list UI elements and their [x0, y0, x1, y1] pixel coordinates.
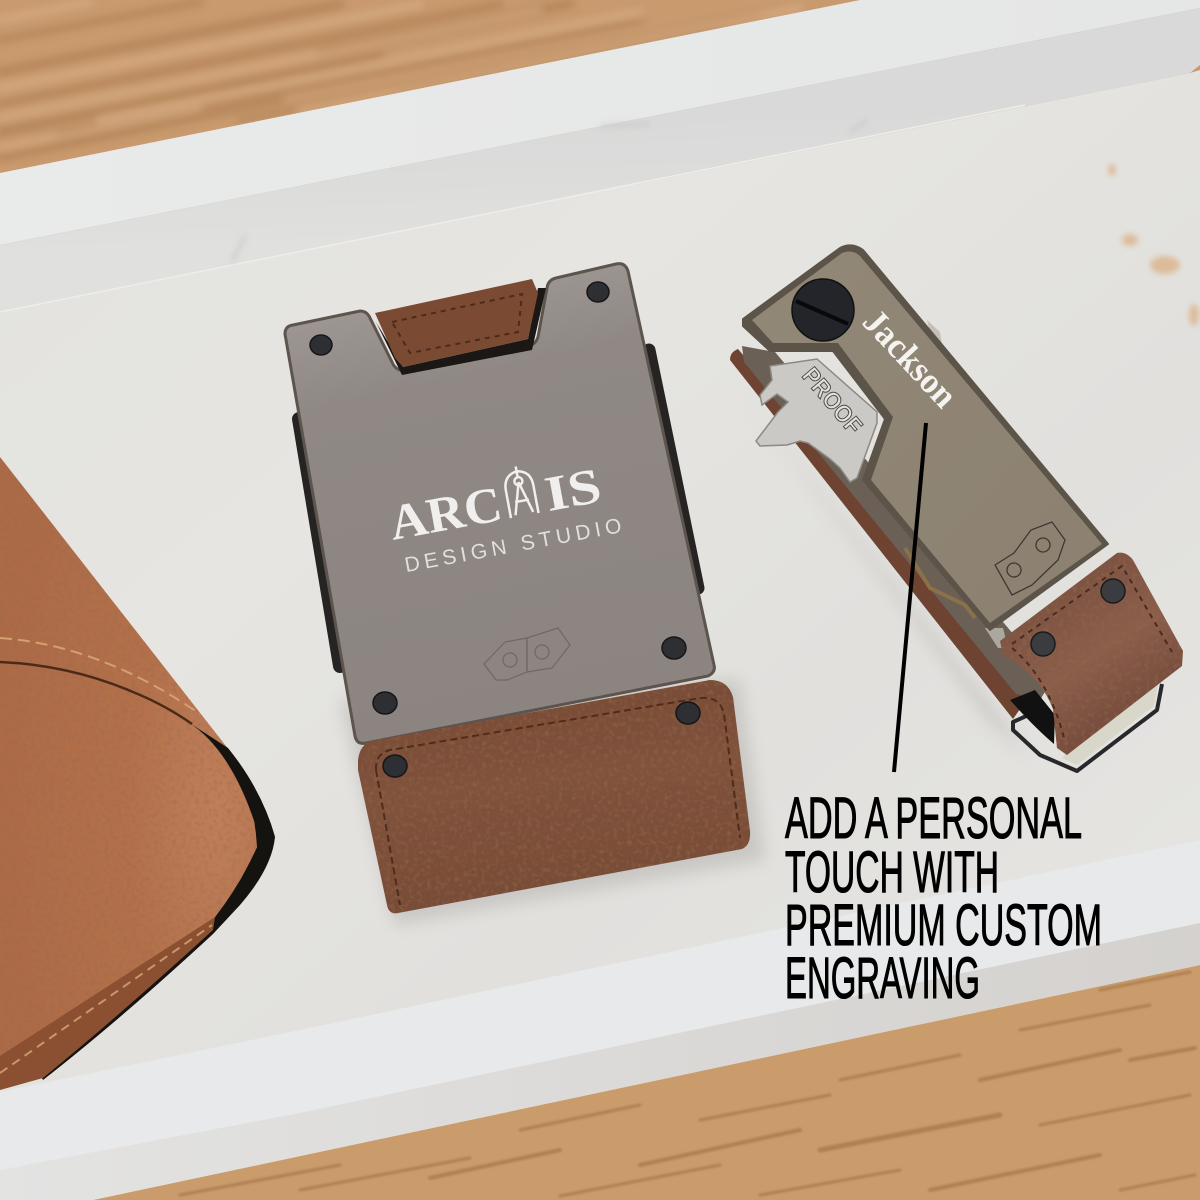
plate screws [310, 282, 686, 714]
marble veins [232, 120, 868, 262]
pouch lower stitches [0, 925, 212, 1073]
rear leather strip [730, 349, 1030, 719]
strap stitching [1012, 566, 1172, 742]
engraved logo: ARCAIS Design Studio: IS [540, 457, 605, 522]
pouch black edge [40, 745, 275, 1080]
folded key detail [905, 548, 975, 618]
pouch flap stitches [0, 638, 200, 714]
tray top rim upper band [0, 0, 1200, 245]
pouch lower band [0, 917, 215, 1090]
tray bottom rim lower band [0, 923, 1200, 1200]
callout text: ENGRAVING [785, 946, 980, 1011]
leather tab [375, 279, 538, 367]
engraved logo: ARCAIS Design Studio: ARC [385, 475, 506, 551]
side stud [927, 320, 943, 350]
engraved hex maker mark [484, 628, 570, 680]
background: wood table [0, 0, 1200, 260]
notch shadow [376, 288, 546, 375]
titanium body [743, 245, 1108, 630]
organizer shadow [740, 390, 1030, 760]
pivot screw [792, 279, 854, 341]
PROOF multitool [756, 359, 877, 482]
metal plate [285, 264, 714, 743]
key organizer with engraved name [730, 245, 1183, 771]
pouch black wedge at tip [188, 722, 275, 837]
wallet with engraving [285, 264, 765, 925]
engraved logo: ARCAIS Design Studio [384, 449, 623, 578]
elastic band left [299, 419, 340, 666]
elastic band right [649, 350, 698, 588]
callout text: TOUCH WITH [785, 840, 999, 905]
engraved logo: ARCAIS Design Studio: DESIGN STUDIO [403, 514, 623, 577]
wallet shadow [340, 680, 765, 925]
engraved hex mark [995, 522, 1065, 595]
PROOF multitool: PROOF [796, 363, 867, 440]
body end clip [985, 628, 1008, 648]
rear metal plate [742, 346, 1052, 700]
bottom wood [93, 965, 1200, 1200]
rust marks on marble [1108, 164, 1199, 326]
inner loop band [1062, 684, 1158, 765]
pouch body [0, 457, 257, 1090]
callout leader line [894, 423, 926, 772]
tray top rim inner wall [0, 8, 1200, 312]
leather strap [1000, 553, 1183, 755]
pouch flap seam [0, 662, 192, 724]
callout text [785, 786, 1102, 1011]
leather cover [358, 680, 750, 913]
tray inner edge highlight [0, 105, 1025, 312]
tray bottom rim upper band [0, 840, 1200, 1170]
compass icon [502, 464, 539, 518]
engraved name: Jackson: Jackson [855, 301, 966, 415]
cover stitching [376, 698, 740, 905]
cover screws [383, 702, 700, 777]
leather pouch at left [0, 457, 275, 1090]
strap screws [1031, 579, 1125, 656]
wire loop [1013, 684, 1162, 771]
black elastic [1010, 690, 1055, 744]
